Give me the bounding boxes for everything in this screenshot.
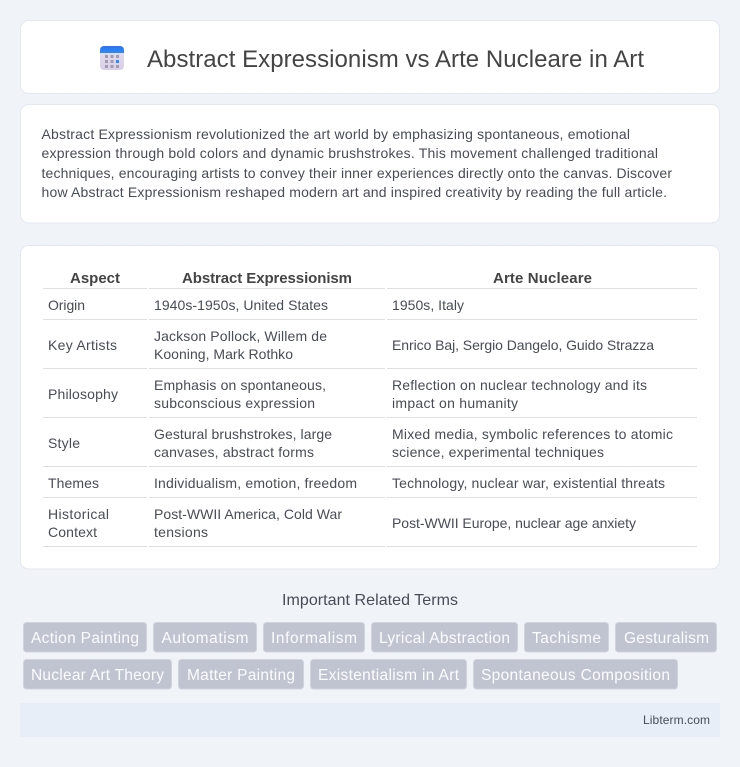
tag: Existentialism in Art: Existentialism in Art [318,667,460,684]
row: historical context: Historical [48,506,109,522]
table header row: Aspect [70,270,120,287]
panel: introduction [20,104,720,223]
row: philosophy: impact on humanity [392,395,518,411]
row: style: science, experimental techniques [392,444,604,460]
footer [20,703,720,737]
panel: comparison table [20,246,720,569]
intro text: how Abstract Expressionism reshaped modern art and inspired creativity by reading the full article. [42,184,667,200]
tag: Nuclear Art Theory [24,660,172,689]
row: themes: Technology, nuclear war, existential threats [392,475,665,491]
row: origin: 1940s-1950s, United States [154,297,328,313]
tag: Matter Painting: Matter Painting [187,667,295,684]
intro text: techniques, encouraging artists to convey their inner experiences directly onto the canvas. Discover [42,165,672,181]
row: historical context: Post-WWII America, Cold War [154,506,342,522]
row: philosophy: Emphasis on spontaneous, [154,377,326,393]
row: key artists: Key Artists [48,337,117,353]
row: key artists: Kooning, Mark Rothko [154,346,293,362]
tag: Informalism [264,622,364,652]
tag: Matter Painting [178,660,304,689]
row: themes: Individualism, emotion, freedom [154,475,357,491]
tag: Nuclear Art Theory: Nuclear Art Theory [31,667,164,684]
icon: calendar [100,46,124,70]
panel: header [20,20,720,94]
related terms tags [24,622,716,689]
row: historical context [48,506,636,540]
row: origin: 1950s, Italy [392,297,464,313]
row: key artists: Jackson Pollock, Willem de [154,328,327,344]
tag: Spontaneous Composition [474,660,678,689]
intro text: expression through bold colors and dynamic brushstrokes. This movement challenged traditional [42,145,658,161]
row: origin [48,297,464,313]
tag: Automatism: Automatism [162,630,248,647]
tag: Spontaneous Composition: Spontaneous Composition [481,667,670,684]
tag: Informalism: Informalism [271,630,357,647]
row: style [48,426,673,460]
intro text: Abstract Expressionism revolutionized the art world by emphasizing spontaneous, emotional [42,126,630,142]
row: historical context: tensions [154,524,208,540]
tag: Automatism [154,622,256,652]
row: philosophy [48,377,647,411]
tag: Tachisme [524,622,608,652]
row: key artists [48,328,654,362]
tag: Gesturalism: Gesturalism [624,630,709,647]
tag: Tachisme: Tachisme [532,630,601,647]
table header row [70,270,592,287]
table header row: Arte Nucleare [493,270,592,287]
tag: Action Painting: Action Painting [31,630,139,647]
row: origin: Origin [48,297,85,313]
row: philosophy: Philosophy [48,386,118,402]
row: themes [48,475,665,491]
row: themes: Themes [48,475,99,491]
tag: Gesturalism [616,622,716,652]
row: style: canvases, abstract forms [154,444,314,460]
row: style: Gestural brushstrokes, large [154,426,332,442]
intro text [42,126,672,200]
row: key artists: Enrico Baj, Sergio Dangelo, Guido Strazza [392,337,654,353]
table rule lines [43,288,697,547]
row: historical context: Post-WWII Europe, nuclear age anxiety [392,515,636,531]
title: Abstract Expressionism vs Arte Nucleare in Art [147,46,644,73]
tag: Existentialism in Art [310,660,466,689]
related terms heading: Important Related Terms [282,592,458,609]
footer credit: Libterm.com [643,713,710,727]
tag: Action Painting [24,622,146,652]
row: style: Mixed media, symbolic references to atomic [392,426,673,442]
tag: Lyrical Abstraction [372,622,518,652]
table header row: Abstract Expressionism [182,270,352,287]
row: historical context: Context [48,524,97,540]
row: philosophy: subconscious expression [154,395,315,411]
row: philosophy: Reflection on nuclear technology and its [392,377,647,393]
tag: Lyrical Abstraction: Lyrical Abstraction [379,630,510,647]
row: style: Style [48,435,80,451]
